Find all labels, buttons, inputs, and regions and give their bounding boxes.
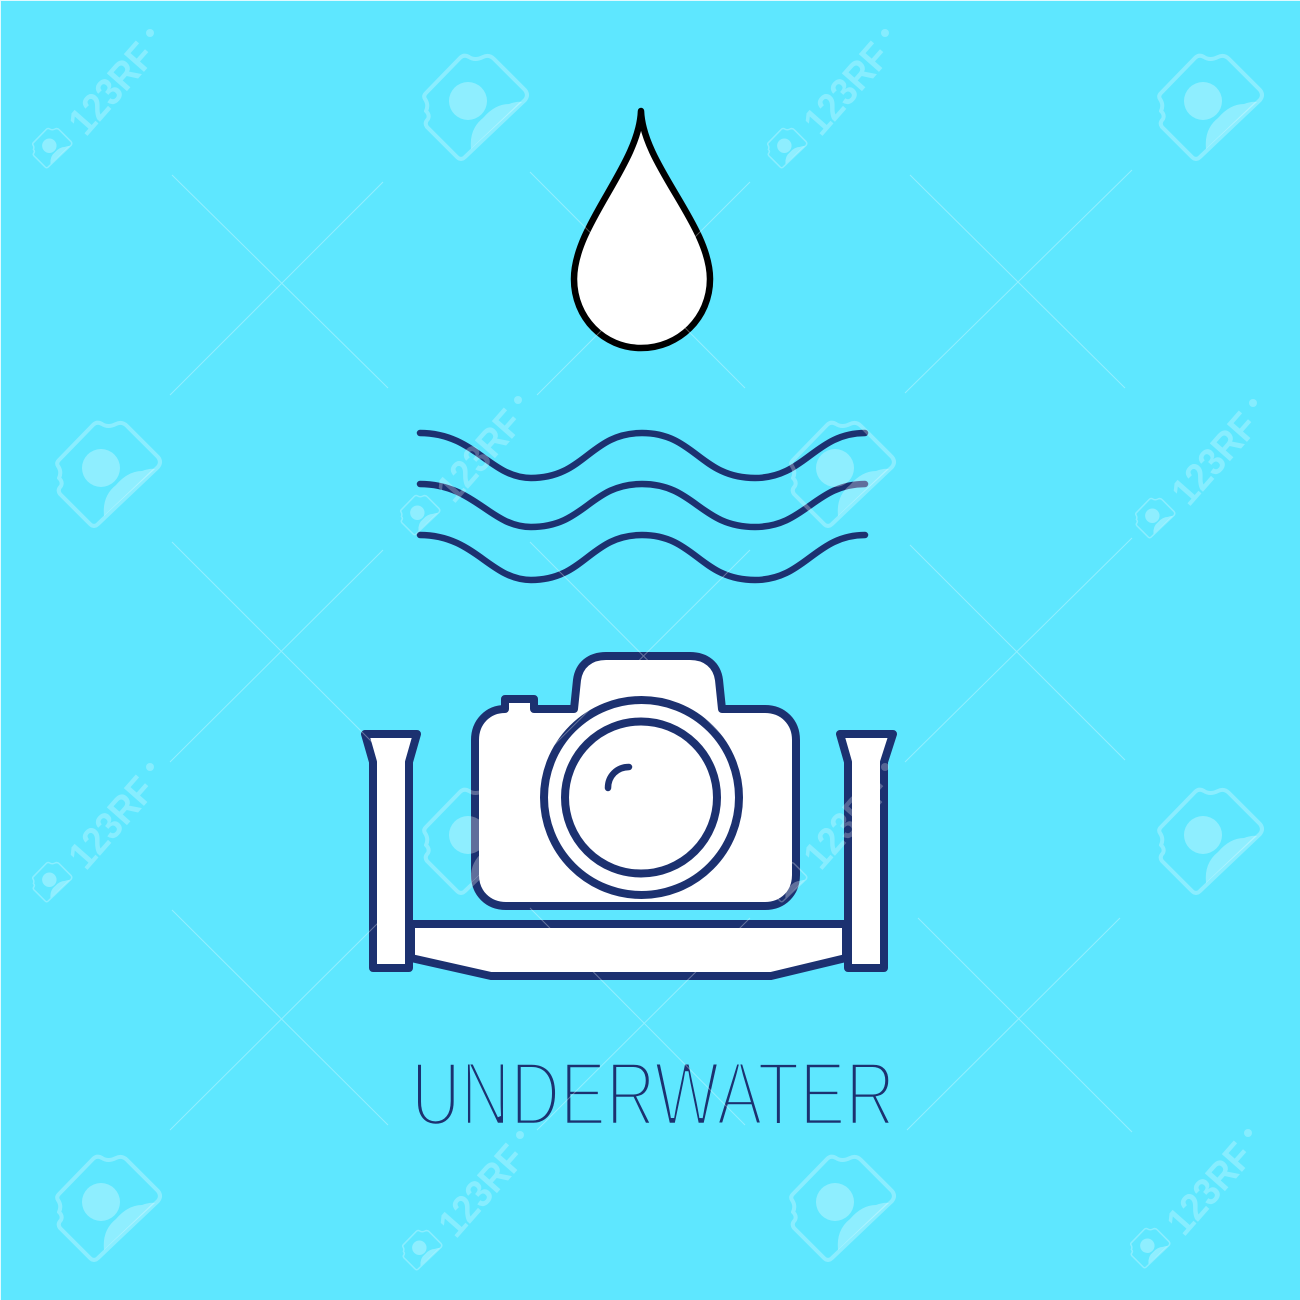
icon: water drop <box>574 111 710 348</box>
icon: waves <box>420 433 865 580</box>
left handle <box>365 734 417 968</box>
icon: underwater camera rig <box>365 656 893 976</box>
title: UNDERWATER <box>411 1044 895 1145</box>
right handle <box>840 734 893 968</box>
camera lens <box>544 700 739 895</box>
lens highlight <box>608 767 629 788</box>
camera tray <box>411 924 846 976</box>
camera body <box>475 656 796 906</box>
